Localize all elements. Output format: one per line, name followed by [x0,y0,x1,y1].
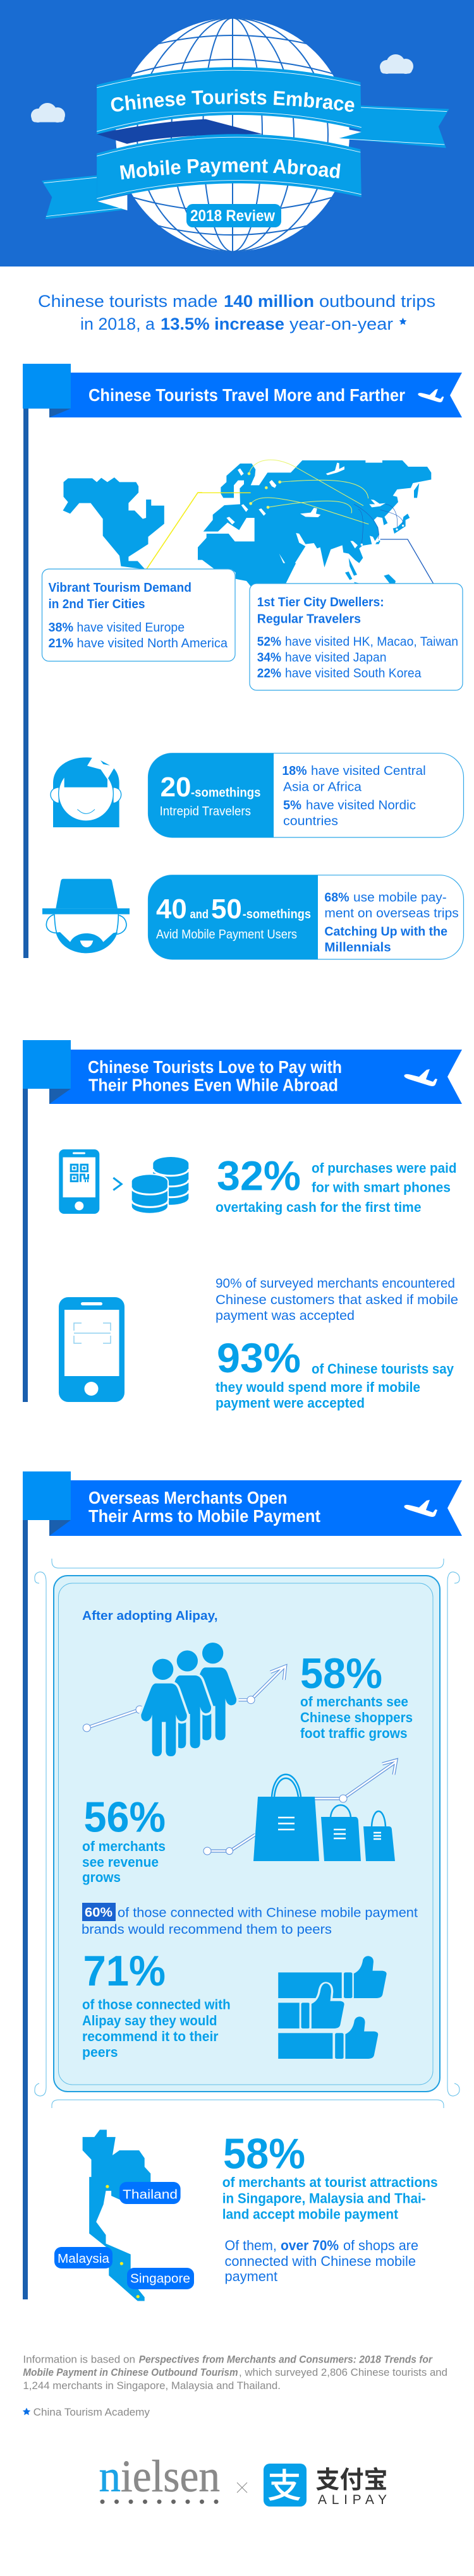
label: Malaysia: Malaysia [58,2252,110,2266]
panel: 20-somethings: countries [283,815,338,829]
panel: 40 and 50-somethings: and [190,908,209,921]
stat: 32% [216,1152,456,1215]
callout: 2nd tier cities: 38% [48,621,73,635]
stat: 58% tourist attractions: in Singapore, Malaysia and Thai- [222,2190,426,2206]
intro statement: 13.5% increase [161,315,284,333]
text: merchants encountered: 90% of surveyed merchants encountered [216,1276,455,1291]
panel: 20-somethings: have visited Nordic [306,799,416,813]
panel: 20-somethings: have visited Central [311,764,426,778]
route lines [198,460,434,584]
stat: 32%: overtaking cash for the first time [216,1199,421,1215]
icon: man with hat [42,879,130,953]
stat: 58% tourist attractions: of merchants at tourist attractions [222,2174,438,2190]
logo: Nielsen: ielsen [121,2451,220,2501]
footnote [23,2354,447,2392]
text: over 70% of shops: payment [225,2268,277,2284]
panel: 20-somethings [148,753,464,837]
map: North America [63,477,164,570]
title text: Mobile Payment Abroad [120,159,341,179]
map: Eurasia and Africa [198,460,434,586]
panel: 40 and 50-somethings: 50 [211,894,242,925]
panel: 40 and 50-somethings: Catching Up with the [324,925,447,939]
stat: 56% revenue [82,1794,166,1885]
callout: 1st tier cities: have visited Japan [285,651,387,665]
panel: 20-somethings: -somethings [191,786,260,800]
source note: China Tourism Academy [33,2406,150,2418]
stat: 71% recommend: of those connected with [82,1997,231,2013]
icon: shopping bags [253,1775,395,1861]
section 2 heading banner [23,1040,462,1104]
icon: plane [404,1069,437,1086]
label: Thailand [119,2182,181,2204]
logo: Alipay: 支 [267,2458,301,2508]
section 1 heading banner [23,364,462,417]
text: 60% recommend to peers: 60% [85,1905,112,1920]
stat: 56% revenue: grows [82,1869,121,1885]
stat: 93%: they would spend more if mobile [216,1379,420,1395]
leader line: 2nd tier [147,493,202,569]
stat: 58% foot traffic: foot traffic grows [300,1725,407,1741]
stat: 56% revenue: of merchants [82,1838,166,1854]
label: Singapore [127,2268,194,2289]
intro statement [38,292,435,333]
chart: foot traffic arrow [83,1666,286,1732]
callout: 1st tier cities: 34% [257,651,281,665]
text: 60% recommend to peers [82,1903,418,1937]
section 2 pole [23,1086,28,1402]
footnote: Information is based on [23,2354,135,2366]
stat: 58% tourist attractions: land accept mobile payment [222,2207,399,2222]
chart: revenue arrow [204,1760,396,1855]
label: Thailand: Thailand [123,2188,178,2202]
label: Malaysia [54,2247,112,2268]
stat: 32%: of purchases were paid [312,1160,456,1176]
stat: 32%: 32% [217,1152,301,1199]
stat: 58% foot traffic: 58% [300,1650,382,1698]
multiply sign [237,2483,247,2493]
panel: 40 and 50-somethings: 40 [156,894,187,925]
intro statement: outbound trips [319,292,435,311]
stat: 93%: payment were accepted [216,1395,365,1411]
callout: 1st tier cities: 1st Tier City Dwellers: [257,596,384,609]
panel: after adopting Alipay [35,1559,459,2108]
icon: chevron greater than [113,1178,121,1190]
panel: 20-somethings: 18% [282,764,307,778]
panel: 40 and 50-somethings: -somethings [243,908,311,921]
stat: 56% revenue: see revenue [82,1854,159,1870]
stat: 32%: for with smart phones [312,1180,451,1195]
intro statement: year-on-year [289,315,393,333]
panel: 20-somethings: Intrepid Travelers [160,805,251,818]
title ribbons [42,67,449,219]
intro statement: in 2018, a [80,315,155,333]
stat: 58% foot traffic [300,1650,413,1741]
stat: 58% tourist attractions [222,2130,438,2222]
stat: 93%: 93% [217,1334,301,1381]
callout: 1st tier cities: have visited South Korea [285,667,422,681]
icon: thumbs up [278,1956,387,2059]
icon: young woman [51,757,121,827]
text: merchants encountered: payment was accepted [216,1309,355,1323]
callout: 1st tier cities: 22% [257,667,281,681]
logo: Alipay: 支付宝 [316,2460,388,2496]
callout: 2nd tier cities: have visited North America [77,637,228,650]
stat: 71% recommend: peers [82,2044,118,2060]
icon: plane [418,389,444,402]
stat: 71% recommend: 71% [83,1947,166,1995]
panel: 40 and 50-somethings: use mobile pay- [353,891,447,905]
section 1 pole [23,404,28,958]
section 3 pole [23,1516,28,2299]
icon: clouds [31,54,413,123]
intro statement: 140 million [224,292,314,311]
stat: 58% foot traffic: of merchants see [300,1694,408,1710]
section 2 heading banner: Chinese Tourists Love to Pay with [88,1057,342,1077]
panel: 20-somethings: 20 [161,772,191,803]
stat: 93% [216,1334,454,1411]
icon: map planes [226,463,386,548]
footnote: , which surveyed 2,806 Chinese tourists and [239,2366,447,2378]
callout: 2nd tier cities [42,569,235,661]
icon: phone with QR code [59,1149,99,1214]
callout: 1st tier cities: have visited HK, Macao, Taiwan [285,635,458,649]
title text: Chinese Tourists Embrace [111,89,354,112]
panel: 20-somethings: Asia or Africa [283,781,362,794]
icon: globe [114,18,351,252]
title text [111,89,354,179]
logo: Alipay [264,2458,388,2508]
world map [42,460,463,690]
icon: phone with scanner [59,1297,125,1402]
panel: 40 and 50-somethings: Millennials [324,941,391,955]
callout: 2nd tier cities: in 2nd Tier Cities [48,597,145,611]
stat: 71% recommend: Alipay say they would [82,2013,217,2028]
section 2 heading banner: Their Phones Even While Abroad [88,1075,338,1095]
header panel [0,0,474,267]
icon: coin stacks [131,1157,188,1213]
footnote: Perspectives from Merchants and Consumers: 2018 Trends for [139,2354,433,2366]
callout: 1st tier cities [250,584,463,690]
review badge: 2018 Review [190,207,275,225]
callout: 2nd tier cities: have visited Europe [77,621,185,635]
stat: 71% recommend [82,1947,231,2060]
stat: 58% foot traffic: Chinese shoppers [300,1710,413,1725]
panel: 40 and 50-somethings: ment on overseas trips [324,907,459,921]
stat: 58% tourist attractions: 58% [223,2130,305,2178]
stat: 71% recommend: recommend it to their [82,2028,219,2044]
logo: Alipay: ALIPAY [318,2493,387,2507]
footnote: Mobile Payment in Chinese Outbound Tourism [23,2366,238,2378]
callout: 2nd tier cities: 21% [48,637,73,650]
callout: 1st tier cities: Regular Travelers [257,613,361,626]
text: merchants encountered: Chinese customers that asked if mobile [216,1293,458,1307]
section 3 heading banner: Overseas Merchants Open [88,1488,287,1507]
label: Singapore: Singapore [130,2272,190,2286]
logo: Nielsen: n [99,2451,121,2501]
panel: 40 and 50-somethings: 68% [324,891,349,905]
callout: 1st tier cities: 52% [257,635,281,649]
stat: 93%: of Chinese tourists say [312,1361,454,1377]
icon: plane [404,1500,437,1517]
section 3 heading banner [23,1471,462,1536]
text: over 70% of shops: Of them, [225,2238,277,2253]
footnote: 1,244 merchants in Singapore, Malaysia and Thailand. [23,2380,281,2392]
text: over 70% of shops: connected with Chinese mobile [225,2253,416,2269]
callout: 2nd tier cities: Vibrant Tourism Demand [48,581,191,595]
intro statement: Chinese tourists made [38,292,217,311]
section 1 heading banner: Chinese Tourists Travel More and Farther [88,385,405,405]
text: merchants encountered [216,1276,458,1323]
text: 60% recommend to peers: brands would recommend them to peers [82,1922,332,1937]
text: 60% recommend to peers: of those connected with Chinese mobile payment [118,1906,418,1920]
map: Thailand Malaysia Singapore [54,2130,194,2301]
panel: 40 and 50-somethings [148,875,464,959]
text: over 70% of shops: of shops are [343,2238,418,2253]
panel: 40 and 50-somethings: Avid Mobile Payment Users [156,928,297,942]
section 3 heading banner: Their Arms to Mobile Payment [88,1506,320,1526]
text: over 70% of shops: over 70% [281,2238,339,2253]
panel: 20-somethings: 5% [283,799,301,813]
stat: 56% revenue: 56% [83,1794,166,1842]
icon: people [141,1643,236,1756]
text: after adopting: After adopting Alipay, [82,1609,217,1623]
text: over 70% of shops [225,2238,418,2284]
